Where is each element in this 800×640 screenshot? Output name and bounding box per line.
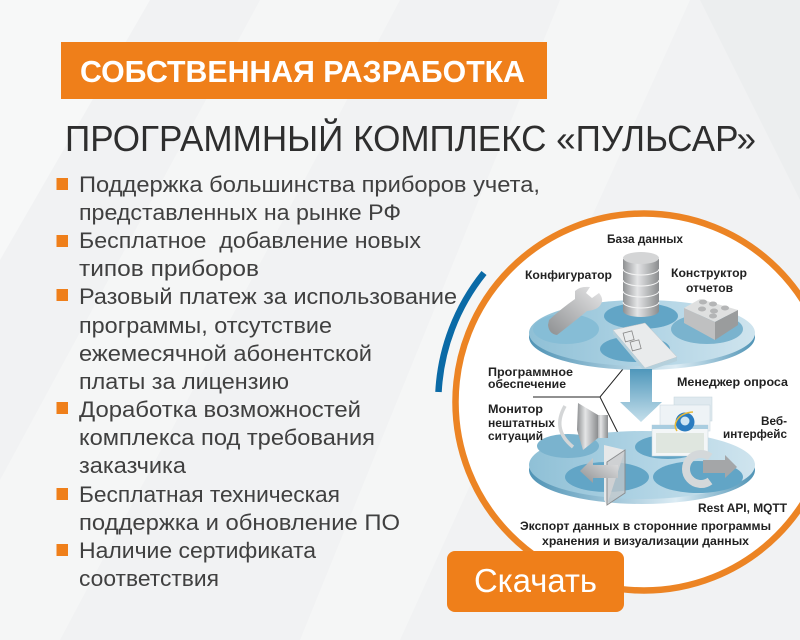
bullet: one-time payment: ежемесячной абонентской (79, 341, 372, 366)
connector lines (533, 369, 623, 433)
bullet: certificate: Наличие сертификата (79, 538, 317, 563)
label: software (488, 367, 573, 391)
label: poll manager: Менеджер опроса (677, 377, 789, 389)
bullet: free device types (56, 228, 421, 281)
bullet: certificate (56, 538, 317, 591)
banner: heading: СОБСТВЕННАЯ РАЗРАБОТКА (80, 54, 525, 89)
icon: loudspeaker (560, 403, 608, 450)
label: incident monitor: ситуаций (488, 431, 543, 443)
label: incident monitor: Монитор (488, 404, 543, 416)
bullet list (56, 172, 540, 591)
banner: heading (61, 42, 547, 99)
label: report builder: отчетов (686, 283, 733, 295)
bullet: free support (56, 482, 400, 535)
bullet: free support: поддержка и обновление ПО (79, 510, 400, 535)
label: report builder: Конструктор (671, 268, 747, 280)
icon: door with arrow (580, 445, 625, 505)
icon: database cylinder (623, 252, 659, 317)
icon: form sheet (613, 323, 677, 372)
label: software: обеспечение (488, 379, 566, 391)
bullet: free support: Бесплатная техническая (79, 482, 340, 507)
lower disc (529, 431, 755, 504)
bullet: one-time payment: Разовый платеж за использование (79, 284, 457, 309)
title: ПРОГРАММНЫЙ КОМПЛЕКС «ПУЛЬСАР» (65, 117, 756, 159)
label: api: Rest API, MQTT (698, 503, 787, 515)
diagram: software platform (488, 234, 789, 548)
bullet: one-time payment: программы, отсутствие (79, 313, 332, 338)
download button (447, 551, 624, 612)
label: configurator: Конфигуратор (525, 270, 612, 282)
label: data export: хранения и визуализации данных (542, 536, 750, 548)
download button: Скачать (474, 562, 597, 599)
bullet: meter support: Поддержка большинства приборов учета, (79, 172, 540, 197)
bullet: meter support: представленных на рынке РФ (79, 200, 401, 225)
bullet: customisation: заказчика (79, 453, 187, 478)
label: web interface (723, 416, 788, 441)
bullet: customisation: Доработка возможностей (79, 397, 361, 422)
bullet: meter support (56, 172, 540, 225)
bullet: one-time payment: платы за лицензию (79, 369, 289, 394)
icon: brick (684, 299, 738, 340)
icon: wrench (548, 287, 602, 335)
label: database: База данных (607, 234, 684, 246)
icon: browser windows (652, 397, 712, 456)
label: web interface: Веб- (761, 416, 787, 428)
bullet: one-time payment (56, 284, 457, 394)
upper disc (529, 300, 755, 370)
bullet: certificate: соответствия (79, 566, 219, 591)
arrow: down (620, 369, 662, 422)
bullet: customisation: комплекса под требования (79, 425, 375, 450)
label: web interface: интерфейс (723, 429, 788, 441)
label: incident monitor (488, 404, 556, 443)
label: data export: Экспорт данных в сторонние программы (520, 521, 771, 533)
bullet: free device types: типов приборов (79, 256, 259, 281)
blue arc accent (438, 273, 484, 392)
label: incident monitor: нештатных (488, 418, 556, 430)
label: data export (520, 521, 771, 548)
bullet: customisation (56, 397, 375, 478)
label: report builder (671, 268, 747, 295)
bullet: free device types: Бесплатное добавление новых (79, 228, 421, 253)
label: software: Программное (488, 367, 573, 379)
diagram circle (456, 214, 800, 590)
icon: refresh export arrow (686, 454, 737, 484)
